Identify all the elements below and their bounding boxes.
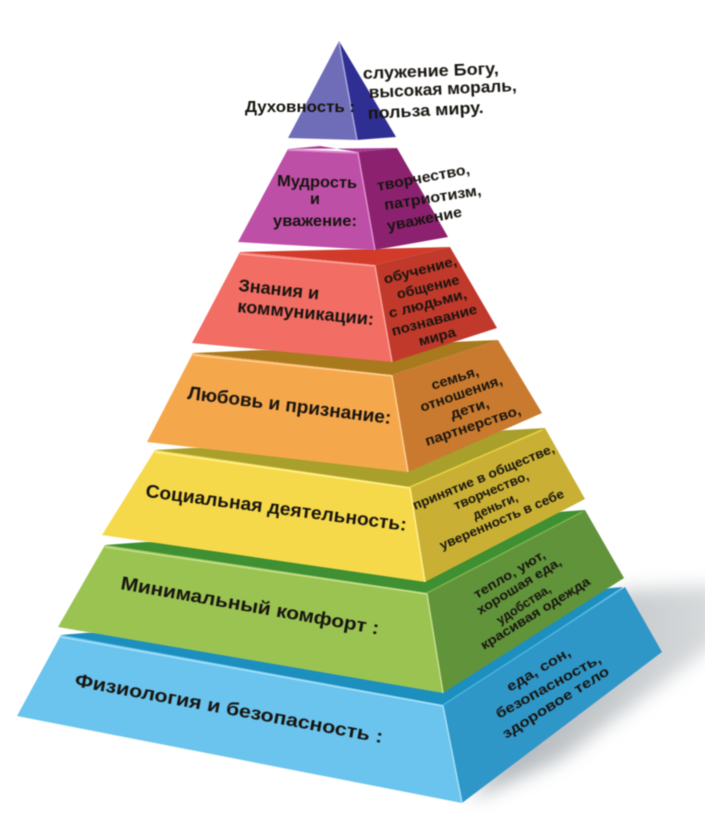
tier 4 details: партнерство, <box>423 402 523 449</box>
tier 3 shape <box>102 428 585 582</box>
tier 2 shape <box>58 510 624 693</box>
tier 5: knowledge and communication <box>192 247 497 362</box>
tier 6 shape <box>238 146 448 250</box>
tier 6 details: патриотизм, <box>383 183 482 214</box>
tier 2 details: удобства, <box>493 581 554 628</box>
tier 6 heading: уважение: <box>273 213 357 230</box>
tier 4 details <box>418 363 523 449</box>
tier 5 details: обучение, <box>382 253 458 287</box>
tier 3 details: деньги, <box>471 490 520 523</box>
tier 7 details <box>362 60 517 123</box>
tier 2: minimal comfort <box>58 510 624 693</box>
tier 2 heading: Минимальный комфорт : <box>119 572 381 638</box>
tier 3 details: творчество, <box>452 469 531 513</box>
tier 5 details: познавание <box>390 301 479 339</box>
tier 1 shape <box>17 587 662 803</box>
tier 2 details: хорошая еда, <box>474 554 564 618</box>
tier 6 details: уважение <box>386 205 463 235</box>
tier 5 heading: Знания и <box>238 275 320 303</box>
ground shadow <box>470 585 705 800</box>
tier 3 heading: Социальная деятельность: <box>144 480 408 535</box>
tier 5 heading <box>237 275 375 329</box>
tier 5 shape <box>192 247 497 362</box>
tier 7: spirituality <box>245 41 517 140</box>
tier 6 details: творчество, <box>376 162 471 195</box>
tier 4 shape <box>147 340 542 472</box>
tier 4 details: семья, <box>429 363 481 393</box>
tier 6 heading <box>273 173 357 230</box>
tier 5 details: с людьми, <box>387 286 468 321</box>
tier 6 heading: и <box>310 191 320 208</box>
tier 4 details: дети, <box>448 395 491 422</box>
tier 1 details: безопасность, <box>493 650 604 722</box>
tier 5 details: общение <box>395 271 461 302</box>
tier 7 details: служение Богу, <box>362 60 499 83</box>
tier 4 details: отношения, <box>418 372 504 415</box>
tier 3 details <box>411 442 566 553</box>
tier 2 details: тепло, уют, <box>471 547 548 602</box>
tier 6 heading: Мудрость <box>277 173 357 192</box>
tier 7 details: польза миру. <box>367 99 484 123</box>
tier 7 heading: Духовность : <box>245 99 355 116</box>
tier 1 details <box>493 644 612 742</box>
tier 1 heading: Физиология и безопасность : <box>73 669 385 747</box>
tier 4: love and recognition <box>147 340 542 472</box>
tier 3 details: уверенность в себе <box>438 487 566 553</box>
tier 5 details <box>382 253 479 349</box>
tier 7 details: высокая мораль, <box>368 77 517 102</box>
tier 4 heading: Любовь и признание: <box>187 382 393 428</box>
tier 6 details <box>376 162 482 235</box>
tier 2 details: красивая одежда <box>478 573 594 653</box>
tier 3: social activity <box>102 428 585 582</box>
tier 1 details: еда, сон, <box>503 644 573 695</box>
tier 3 details: принятие в обществе, <box>411 442 557 513</box>
tier 2 details <box>471 547 594 653</box>
tier 5 details: мира <box>417 324 458 349</box>
tier 7 shape <box>288 41 396 140</box>
tier 1 details: здоровое тело <box>499 663 612 742</box>
tier 1: physiology and safety <box>17 587 662 803</box>
tier 6: wisdom and respect <box>238 146 482 250</box>
tier 5 heading: коммуникации: <box>237 296 375 329</box>
